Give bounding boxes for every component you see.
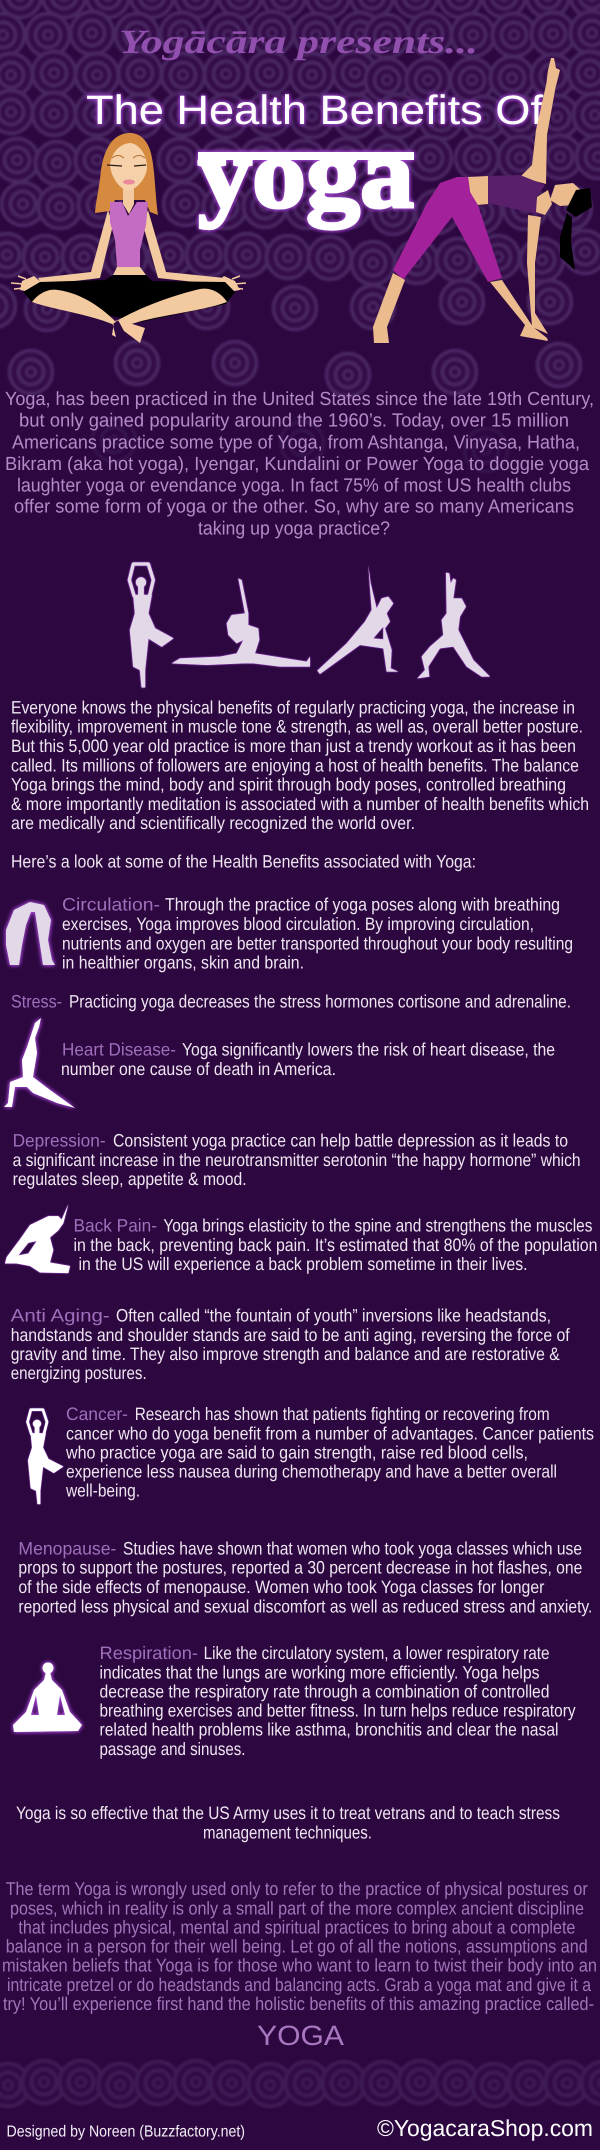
text: benefits lead-in: Here’s a look at some of the Health Benefits associated with Yoga: [11, 851, 476, 871]
intro paragraph: Bikram (aka hot yoga), Iyengar, Kundalini or Power Yoga to doggie yoga [5, 454, 589, 475]
title: yoga logo: yoga [198, 118, 414, 230]
benefit: respiration: Like the circulatory system, a lower respiratory rate [204, 1643, 550, 1663]
spiral pattern: header [0, 0, 600, 472]
benefit: anti aging: Often called “the fountain of youth” inversions like headstands, [116, 1306, 551, 1326]
heading: closing YOGA: YOGA [257, 2020, 344, 2051]
closing paragraph [2, 1878, 597, 2014]
credit: website: ©YogacaraShop.com [377, 2115, 593, 2141]
silhouettes: four yoga poses [129, 564, 490, 687]
benefit: respiration: passage and sinuses. [100, 1739, 246, 1759]
intro paragraph: but only gained popularity around the 1960’s. Today, over 15 million [19, 411, 569, 432]
benefit: stress: Stress- [11, 992, 62, 1012]
benefit: depression: regulates sleep, appetite & mood. [13, 1169, 247, 1189]
benefit: circulation: Through the practice of yoga poses along with breathing [165, 895, 560, 915]
pose: tree [129, 564, 173, 687]
benefit: cancer: Cancer- [66, 1404, 128, 1424]
icon: tree pose [28, 1410, 63, 1504]
benefit: anti aging: energizing postures. [11, 1363, 147, 1383]
illustration: woman in triangle pose [373, 58, 592, 343]
benefit: depression [13, 1131, 581, 1189]
spiral band: footer [0, 2060, 600, 2106]
intro paragraph [5, 389, 594, 539]
icon: seated meditation [13, 1662, 82, 1732]
benefit: circulation: exercises, Yoga improves blood circulation. By improving circulation, [62, 914, 534, 934]
pose: seated split [172, 578, 310, 667]
benefit: depression: Depression- [13, 1131, 106, 1151]
intro paragraph: laughter yoga or evendance yoga. In fact 75% of most US health clubs [17, 476, 571, 497]
benefit: anti aging: Anti Aging- [11, 1306, 110, 1326]
benefit: respiration [100, 1643, 576, 1759]
intro paragraph: taking up yoga practice? [198, 518, 390, 539]
benefit: cancer [65, 1404, 594, 1501]
heading: Yogacara presents: Yogācāra presents... [119, 24, 478, 61]
benefit: circulation: in healthier organs, skin and brain. [62, 952, 304, 972]
benefit: heart disease [61, 1040, 555, 1079]
benefit: heart disease: Heart Disease- [62, 1040, 176, 1060]
benefit: circulation: Circulation- [62, 895, 160, 915]
pose: side angle [317, 565, 398, 674]
benefit: respiration: indicates that the lungs are working more efficiently. Yoga helps [100, 1662, 540, 1682]
text: US Army note: management techniques. [203, 1822, 372, 1842]
illustration: woman meditating [11, 133, 246, 343]
icon: warrior pose [4, 1018, 75, 1108]
intro paragraph: offer some form of yoga or the other. So, why are so many Americans [14, 497, 574, 518]
benefit: heart disease: Yoga significantly lowers the risk of heart disease, the [182, 1040, 555, 1060]
benefit: cancer: who practice yoga are said to gain strength, raise red blood cells, [65, 1442, 528, 1462]
benefit: circulation [62, 895, 573, 972]
benefit: heart disease: number one cause of death in America. [61, 1059, 336, 1079]
icon: dancer pose [5, 1204, 70, 1273]
intro paragraph: Americans practice some type of Yoga, from Ashtanga, Vinyasa, Hatha, [12, 432, 580, 453]
text block: physical benefits [11, 697, 589, 833]
text: US Army note [16, 1803, 560, 1842]
benefit: menopause [18, 1538, 592, 1616]
pose: warrior [417, 573, 490, 678]
benefit: back pain [74, 1216, 598, 1274]
benefit: anti aging [11, 1306, 571, 1383]
credit: designer: Designed by Noreen (Buzzfactory.net) [6, 2124, 245, 2141]
icon: backbend pose [6, 902, 55, 965]
benefit: respiration: Respiration- [100, 1643, 198, 1663]
benefit: back pain: Back Pain- [74, 1216, 157, 1236]
benefit: menopause: Menopause- [18, 1538, 116, 1558]
title: The Health Benefits Of: The Health Benefits Of [86, 87, 544, 133]
benefit: cancer: well-being. [65, 1481, 140, 1501]
text block: physical benefits: are medically and scientifically recognized the world over. [11, 813, 415, 833]
benefit: back pain: in the US will experience a back problem sometime in their lives. [78, 1254, 528, 1274]
